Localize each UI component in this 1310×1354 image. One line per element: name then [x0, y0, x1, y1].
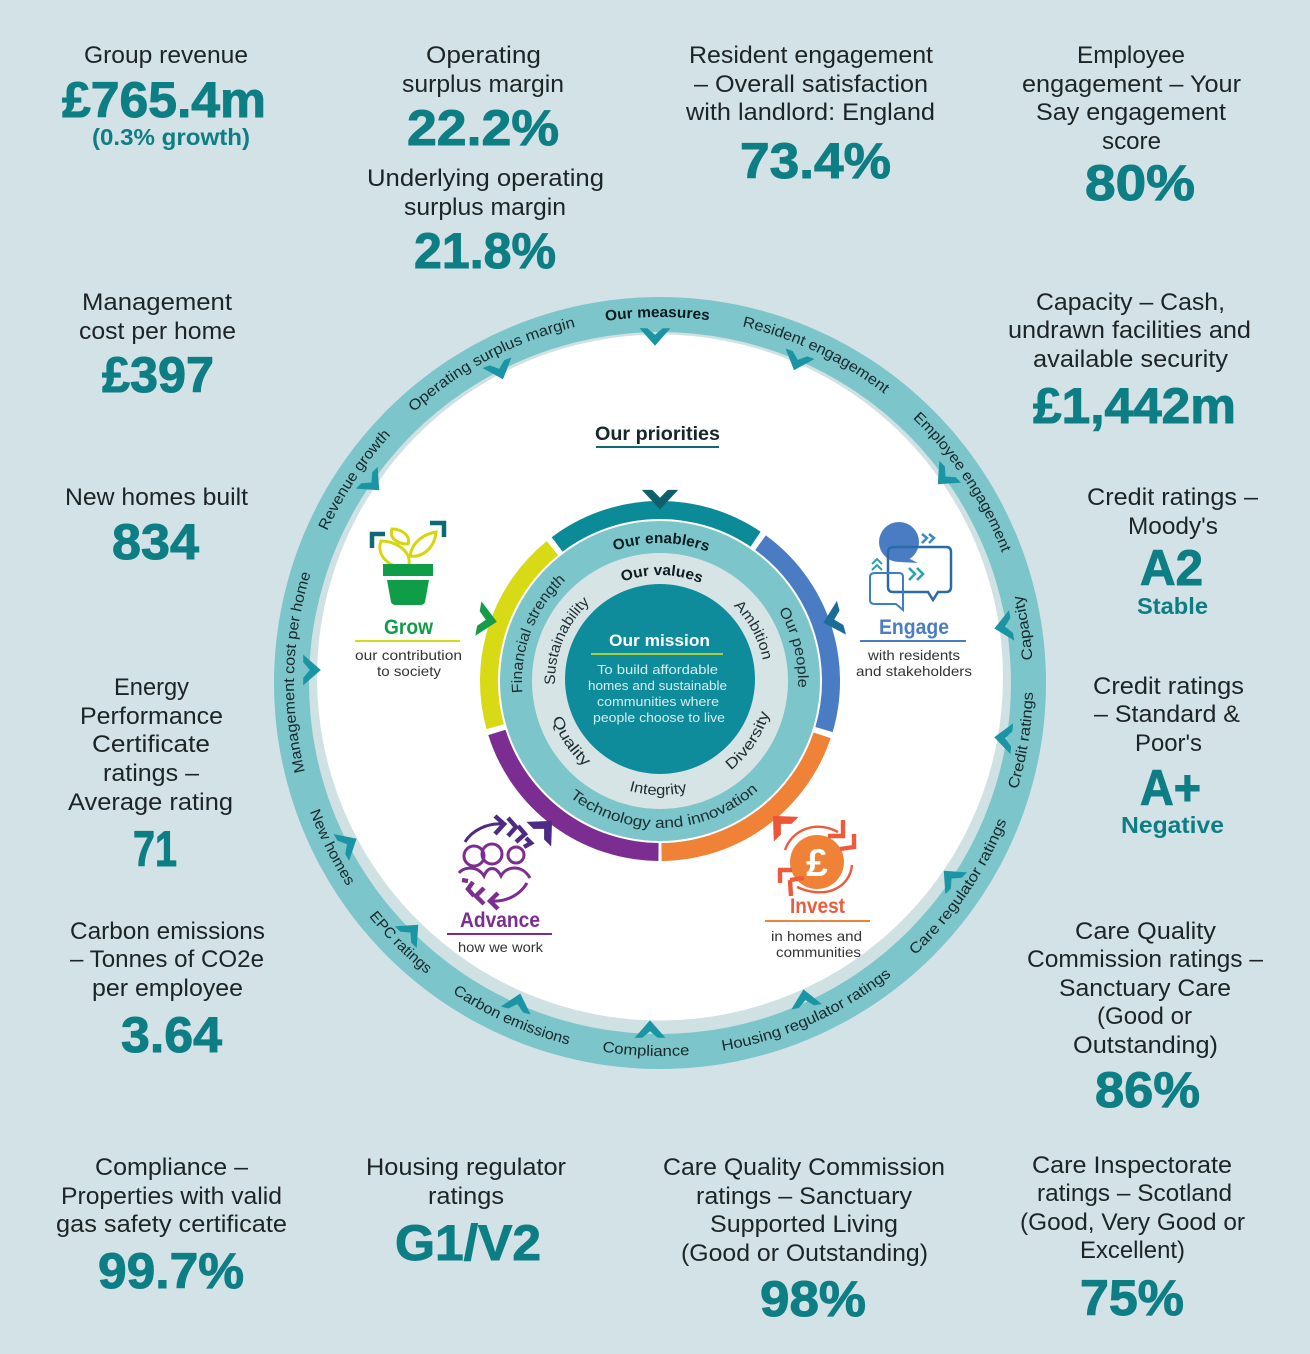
label: capacity: Capacity	[1014, 596, 1034, 660]
label: EPC ratings: EPC ratings	[370, 910, 430, 973]
kpi: employee engagement: Say engagement	[1036, 99, 1226, 126]
mission text: homes and sustainable	[588, 678, 727, 693]
engage description: and stakeholders	[856, 663, 972, 679]
kpi: management cost per home: cost per home	[79, 318, 236, 345]
kpi: credit ratings moody's: Moody's	[1128, 513, 1218, 540]
kpi: compliance: Compliance –	[95, 1154, 249, 1181]
enablers ring	[500, 521, 820, 841]
label: care regulator ratings: Care regulator ratings	[910, 819, 1006, 953]
kpi: capacity: Capacity – Cash,	[1036, 289, 1225, 316]
label: housing regulator ratings: Housing regulator ratings	[722, 970, 890, 1050]
outer ring	[274, 297, 1046, 1069]
kpi: resident engagement	[685, 42, 935, 189]
invest description	[771, 928, 862, 960]
kpi: carbon emissions	[70, 918, 265, 1063]
heading: our priorities: Our priorities	[595, 424, 720, 445]
kpi: care inspectorate scotland: 75%	[1080, 1270, 1184, 1326]
kpi: care quality commission sanctuary care	[1027, 918, 1264, 1118]
kpi: housing regulator ratings	[366, 1154, 566, 1271]
kpi: employee engagement	[1022, 42, 1241, 211]
wheel chevron: blue	[819, 601, 846, 639]
arc: our measures teal	[557, 510, 756, 544]
kpi: carbon emissions: – Tonnes of CO2e	[70, 946, 264, 973]
kpi: care inspectorate scotland: Excellent)	[1080, 1237, 1185, 1264]
kpi: care quality commission supported living: ratings – Sanctuary	[696, 1183, 912, 1210]
label: operating surplus margin: Operating surplus margin	[409, 318, 574, 410]
advance description: how we work	[458, 939, 544, 955]
label: our measures: Our measures	[606, 309, 709, 320]
kpi: housing regulator ratings: ratings	[428, 1183, 504, 1210]
kpi: credit ratings moody's: Stable	[1137, 593, 1208, 619]
label: credit ratings: Credit ratings	[1008, 692, 1036, 788]
kpi: resident engagement: with landlord: England	[685, 99, 935, 126]
kpi: underlying operating surplus margin	[367, 165, 604, 279]
kpi: care quality commission sanctuary care: Care Quality	[1075, 918, 1216, 945]
mission text: Our mission	[609, 631, 710, 650]
engage title: Engage	[879, 616, 949, 639]
kpi: care quality commission sanctuary care: (Good or	[1097, 1003, 1192, 1030]
icon: people with arrows	[459, 816, 531, 909]
kpi: carbon emissions: per employee	[92, 975, 243, 1002]
kpi: energy performance certificate: Energy	[114, 674, 189, 701]
kpi: care inspectorate scotland: ratings – Scotland	[1037, 1180, 1232, 1207]
mission text: To build affordable	[597, 662, 718, 677]
kpi: capacity: £1,442m	[1033, 378, 1236, 434]
kpi: credit ratings standard and poor's: Credit ratings	[1093, 673, 1244, 700]
label: carbon emissions: Carbon emissions	[454, 986, 570, 1044]
kpi: operating surplus margin: Operating	[426, 42, 541, 69]
kpi: credit ratings moody's: A2	[1140, 540, 1203, 596]
engage description: with residents	[867, 647, 960, 663]
label: our enablers: Our enablers	[613, 532, 709, 551]
icon: pound coin: £	[806, 842, 828, 885]
kpi: resident engagement: – Overall satisfaction	[694, 71, 928, 98]
kpi: operating surplus margin: 22.2%	[407, 100, 559, 156]
kpi: compliance: Properties with valid	[61, 1183, 282, 1210]
kpi: operating surplus margin: surplus margin	[402, 71, 564, 98]
kpi: care inspectorate scotland: Care Inspectorate	[1032, 1152, 1232, 1179]
label: technology and innovation: Technology and innovation	[573, 786, 758, 830]
kpi: carbon emissions: 3.64	[121, 1007, 222, 1063]
kpi: employee engagement: score	[1102, 128, 1161, 155]
kpi: care quality commission sanctuary care: Outstanding)	[1073, 1032, 1218, 1059]
arc: invest orange	[662, 735, 822, 852]
kpi: resident engagement: 73.4%	[740, 133, 891, 189]
white centre	[317, 334, 1003, 1020]
advance title: Advance	[460, 909, 540, 932]
invest title: Invest	[790, 895, 845, 918]
kpi: compliance: gas safety certificate	[56, 1211, 287, 1238]
kpi: group revenue: £765.4m	[62, 72, 266, 128]
kpi: care quality commission supported living: Supported Living	[710, 1211, 898, 1238]
label: sustainability: Sustainability	[544, 597, 588, 684]
kpi: compliance	[56, 1154, 287, 1299]
label: revenue growth: Revenue growth	[318, 431, 390, 530]
kpi: care quality commission supported living	[663, 1154, 945, 1327]
kpi: capacity	[1008, 289, 1251, 434]
label: quality: Quality	[553, 716, 590, 765]
kpi: underlying operating surplus margin: 21.8%	[414, 223, 556, 279]
kpi: energy performance certificate: Average rating	[68, 789, 233, 816]
label: integrity: Integrity	[630, 781, 686, 798]
wheel chevron: green	[475, 601, 500, 639]
measures ring diagram	[274, 297, 1046, 1069]
kpi: group revenue: Group revenue	[84, 42, 248, 69]
kpi: capacity: undrawn facilities and	[1008, 317, 1251, 344]
kpi: energy performance certificate: 71	[133, 821, 177, 877]
mission text	[588, 631, 727, 725]
priority: engage	[856, 522, 972, 679]
mission text: communities where	[597, 694, 719, 709]
kpi: care inspectorate scotland	[1020, 1152, 1245, 1326]
arc: engage blue	[760, 543, 831, 730]
kpi: new homes built: New homes built	[65, 484, 248, 511]
kpi: carbon emissions: Carbon emissions	[70, 918, 265, 945]
label: financial strength: Financial strength	[511, 576, 565, 692]
kpi: underlying operating surplus margin: Underlying operating	[367, 165, 604, 192]
kpi: housing regulator ratings: Housing regulator	[366, 1154, 566, 1181]
kpi: housing regulator ratings: G1/V2	[395, 1215, 541, 1271]
kpi: care quality commission sanctuary care: 86%	[1095, 1062, 1200, 1118]
icon: speech bubbles	[870, 522, 951, 610]
kpi: capacity: available security	[1033, 346, 1228, 373]
label: our people: Our people	[780, 608, 809, 688]
kpi: new homes built	[65, 484, 248, 570]
arc: advance purple	[497, 732, 658, 852]
label: employee engagement: Employee engagement	[914, 412, 1010, 553]
label: resident engagement: Resident engagement	[744, 316, 889, 394]
kpi: care quality commission supported living: (Good or Outstanding)	[681, 1240, 928, 1267]
inner crescent	[309, 332, 1011, 1034]
kpi: care quality commission sanctuary care: Commission ratings –	[1027, 946, 1264, 973]
grow description: our contribution	[355, 647, 462, 663]
wheel chevron: purple	[526, 809, 564, 847]
values ring	[532, 553, 788, 809]
ring labels	[284, 309, 1036, 1058]
kpi: management cost per home: Management	[82, 289, 232, 316]
kpi: group revenue: (0.3% growth)	[92, 124, 250, 150]
mission text: people choose to live	[593, 710, 725, 725]
grow description: to society	[377, 663, 441, 679]
kpi: care quality commission sanctuary care: Sanctuary Care	[1059, 975, 1231, 1002]
invest description: in homes and	[771, 928, 862, 944]
kpi: underlying operating surplus margin: surplus margin	[404, 194, 566, 221]
priorities wheel	[475, 490, 846, 861]
kpi: credit ratings standard and poor's: A+	[1140, 760, 1201, 816]
label: ambition: Ambition	[734, 602, 770, 660]
kpi: employee engagement: 80%	[1085, 155, 1195, 211]
kpi: management cost per home: £397	[102, 347, 214, 403]
engage description	[856, 647, 972, 679]
kpi: energy performance certificate: Performance	[80, 703, 223, 730]
kpi: operating surplus margin	[402, 42, 564, 156]
grow title: Grow	[384, 616, 434, 639]
kpi: management cost per home	[79, 289, 236, 403]
icon: plant pot	[372, 523, 444, 605]
kpi: credit ratings standard and poor's	[1093, 673, 1244, 838]
priority: grow	[355, 523, 462, 679]
kpi: new homes built: 834	[112, 514, 199, 570]
kpi: employee engagement: engagement – Your	[1022, 71, 1241, 98]
kpi: compliance: 99.7%	[98, 1243, 244, 1299]
ring chevrons	[303, 328, 1014, 1038]
invest description: communities	[776, 944, 861, 960]
kpi: credit ratings standard and poor's: Negative	[1121, 812, 1224, 838]
kpi: care quality commission supported living: Care Quality Commission	[663, 1154, 945, 1181]
kpi: credit ratings moody's	[1087, 484, 1259, 619]
arc: grow yellow	[489, 548, 552, 727]
kpi: energy performance certificate	[68, 674, 233, 877]
priority: advance	[447, 816, 552, 955]
label: management cost per home: Management cost per home	[284, 572, 310, 773]
wheel chevron: orange	[761, 804, 799, 842]
kpi: energy performance certificate: Certificate	[92, 731, 210, 758]
wheel chevron: top	[642, 490, 678, 509]
mission circle	[565, 584, 755, 774]
kpi: care inspectorate scotland: (Good, Very Good or	[1020, 1209, 1245, 1236]
kpi: group revenue	[62, 42, 266, 150]
kpi: credit ratings standard and poor's: Poor's	[1135, 730, 1202, 757]
kpi: care quality commission supported living: 98%	[760, 1271, 866, 1327]
priority: invest	[765, 820, 870, 960]
grow description	[355, 647, 462, 679]
kpi: resident engagement: Resident engagement	[689, 42, 933, 69]
kpi: credit ratings standard and poor's: – Standard &	[1094, 701, 1240, 728]
label: new homes: New homes	[310, 809, 353, 885]
label: compliance: Compliance	[604, 1042, 689, 1058]
label: our values: Our values	[621, 564, 702, 582]
label: diversity: Diversity	[725, 710, 770, 770]
kpi: credit ratings moody's: Credit ratings –	[1087, 484, 1259, 511]
kpi: energy performance certificate: ratings –	[103, 760, 200, 787]
kpi: employee engagement: Employee	[1077, 42, 1185, 69]
